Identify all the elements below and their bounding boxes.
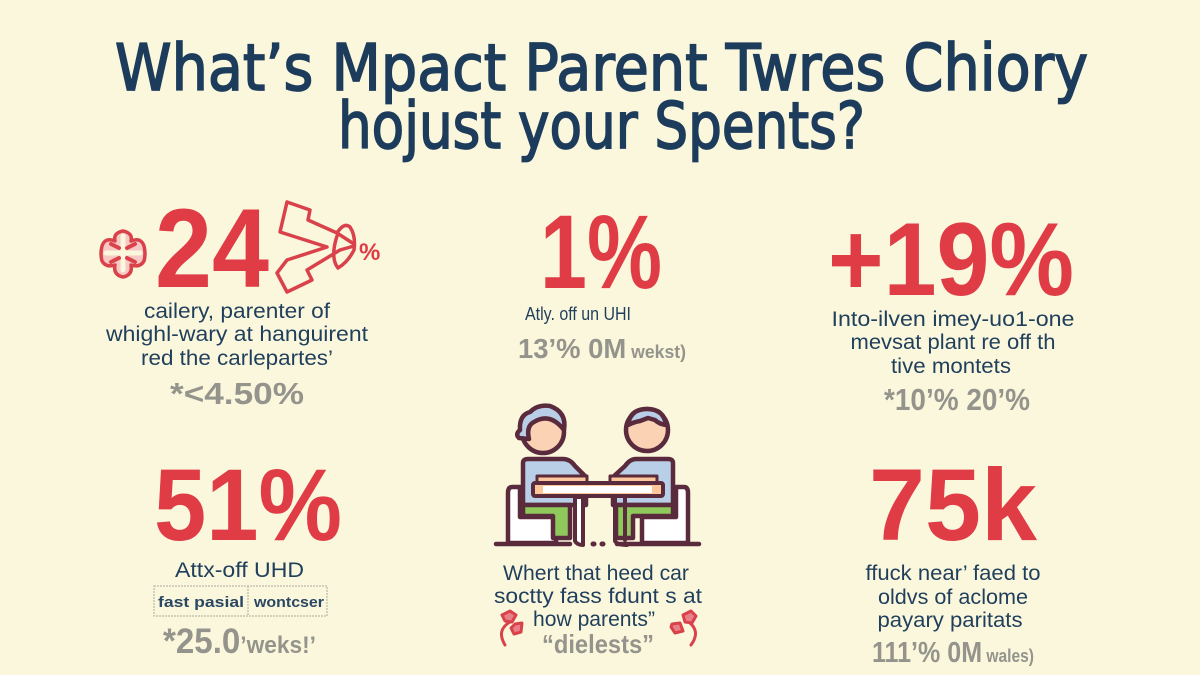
grey figure: *10’% 20’% bbox=[884, 382, 1030, 417]
icon: red flower emblem bbox=[101, 231, 145, 277]
grey figure: *<4.50% bbox=[170, 376, 304, 411]
big number 51%: 51% bbox=[154, 448, 342, 562]
description: how parents” bbox=[533, 608, 655, 631]
floor bbox=[496, 542, 699, 546]
description: ffuck near’ faed to bbox=[866, 562, 1040, 585]
icon: left floral sprig bbox=[501, 611, 522, 645]
description: tive montets bbox=[891, 355, 1011, 378]
title bbox=[115, 32, 1088, 164]
big number 1%: 1% bbox=[540, 194, 662, 311]
description bbox=[832, 308, 1074, 378]
grey figure: 13’% 0M wekst) bbox=[518, 333, 686, 364]
panel: stat 1% bbox=[518, 194, 686, 364]
right person body bbox=[613, 459, 673, 505]
panel: stat 75k bbox=[866, 448, 1040, 669]
title: What’s Mpact Parent Twres Chiory bbox=[115, 32, 1088, 106]
description: Attx-off UHD bbox=[175, 559, 304, 582]
table bbox=[537, 476, 587, 483]
dotted label box: wontcser bbox=[253, 594, 324, 611]
icon: right floral sprig bbox=[671, 611, 696, 645]
description: Into-ilven imey-uo1-one bbox=[832, 308, 1074, 331]
description: Atly. off un UHI bbox=[525, 304, 631, 324]
title: hojust your Spents? bbox=[338, 90, 865, 164]
big number 75k: 75k bbox=[869, 448, 1037, 562]
left person body bbox=[523, 459, 586, 505]
grey figure: 111’% 0M wales) bbox=[872, 637, 1034, 669]
description: payary paritats bbox=[878, 609, 1022, 632]
description: mevsat plant re off th bbox=[850, 331, 1056, 354]
panel: parents illustration bbox=[494, 406, 702, 659]
description bbox=[105, 300, 368, 370]
grey figure: *25.0’weks!’ bbox=[163, 622, 316, 661]
heads bbox=[522, 411, 564, 453]
panel: stat 51% bbox=[154, 448, 342, 661]
small percent sign: % bbox=[359, 239, 380, 266]
description: whighl-wary at hanguirent bbox=[105, 323, 368, 346]
description bbox=[494, 562, 702, 631]
description: Whert that heed car bbox=[503, 562, 689, 585]
panel: stat +19% bbox=[828, 202, 1074, 417]
description: red the carlepartes’ bbox=[141, 347, 333, 370]
big number +19%: +19% bbox=[828, 202, 1074, 318]
dotted label box: fast pasial bbox=[158, 594, 244, 611]
icon: red outline ribbon shape bbox=[277, 202, 354, 292]
description bbox=[866, 562, 1040, 632]
description: soctty fass fdunt s at bbox=[494, 585, 702, 608]
description: cailery, parenter of bbox=[144, 300, 330, 323]
description: oldvs of aclome bbox=[878, 586, 1028, 609]
panel: stat 24 bbox=[101, 186, 380, 411]
chairs bbox=[508, 487, 556, 543]
big number 24: 24 bbox=[155, 186, 269, 311]
illustration: two parents at a table bbox=[496, 406, 699, 545]
grey figure: “dielests” bbox=[542, 629, 654, 659]
dotted label box bbox=[154, 586, 327, 616]
